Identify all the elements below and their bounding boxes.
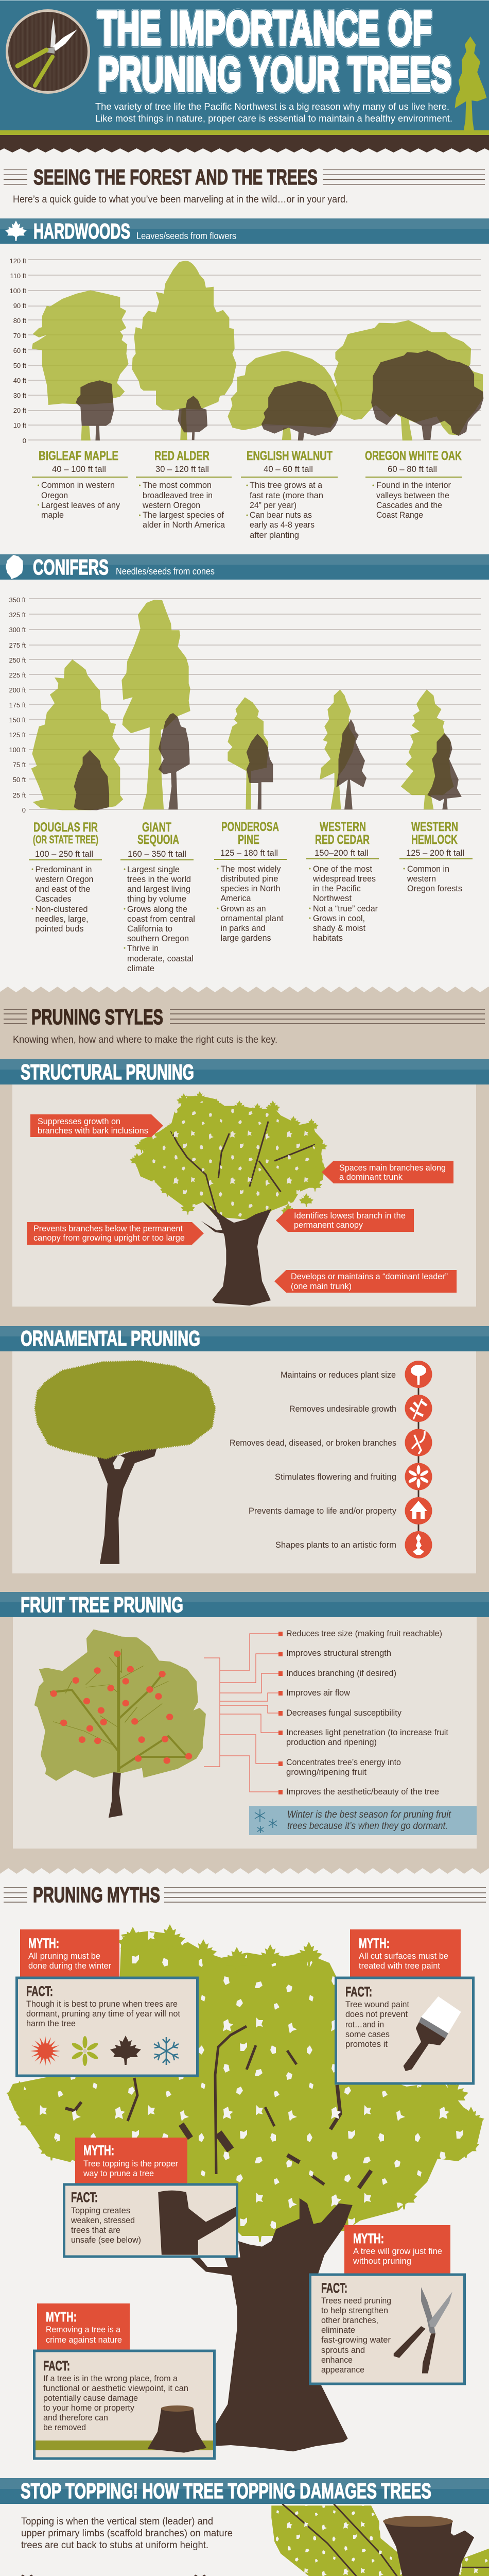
hardwoods height chart xyxy=(9,257,483,445)
tree info: red alder: The most common xyxy=(143,481,212,490)
tree info: giant sequoia: GIANT xyxy=(142,820,171,835)
fact 4: trees need pruning: sprouts and xyxy=(321,2346,365,2355)
tree info: western hemlock: Common in xyxy=(407,865,449,874)
section bar: conifers: Needles/seeds from cones xyxy=(116,566,215,577)
illustration: large tree xyxy=(6,1924,484,2451)
heading: pruning styles xyxy=(4,1005,485,1029)
fact 5: wrong place: potentially cause damage xyxy=(43,2394,138,2403)
fact 5: wrong place: If a tree is in the wrong place, from a xyxy=(43,2374,178,2383)
tree info: bigleaf maple: Common in western xyxy=(41,481,115,490)
tree info: western red cedar: Grows in cool, xyxy=(313,914,365,923)
icon: conifer sprig xyxy=(6,555,23,579)
icon: bare twig xyxy=(412,1431,425,1454)
tree info: bigleaf maple: Oregon xyxy=(41,491,68,500)
callout: spaces main branches: a dominant trunk xyxy=(339,1173,403,1182)
axis labels: 175 ft xyxy=(9,701,26,709)
callout: bark inclusions: branches with bark inclusions xyxy=(38,1126,148,1136)
callout: winter tip: Winter is the best season for pruning fruit xyxy=(287,1809,451,1820)
fact 1: seasons: FACT: xyxy=(26,1984,53,1999)
myth 4: growth without pruning: MYTH: xyxy=(353,2231,384,2246)
tree info: western red cedar: RED CEDAR xyxy=(315,833,370,847)
fact 3: topping creates unsafe trees: Topping creates xyxy=(71,2206,130,2215)
axis labels: 70 ft xyxy=(13,332,26,340)
tree info: english walnut: after planting xyxy=(250,531,299,540)
callout: lowest branch xyxy=(276,1209,414,1232)
myth 4: growth without pruning: without pruning xyxy=(353,2257,411,2266)
tree info: english walnut: ENGLISH WALNUT xyxy=(247,449,333,463)
axis labels: 100 ft xyxy=(9,746,26,754)
myth 1: winter pruning: MYTH: xyxy=(28,1936,59,1951)
tree info: giant sequoia: 160 – 350 ft tall xyxy=(128,850,186,859)
myth 4: growth without pruning: A tree will grow just fine xyxy=(353,2247,442,2256)
myth 4: growth without pruning xyxy=(344,2225,450,2274)
tree info: giant sequoia: California to xyxy=(127,924,172,934)
axis labels xyxy=(9,257,26,445)
panel: structural pruning: STRUCTURAL PRUNING xyxy=(21,1060,194,1084)
tree info: ponderosa pine: distributed pine xyxy=(220,874,278,884)
axis labels: 50 ft xyxy=(13,776,26,784)
tree info: douglas fir: (OR STATE TREE) xyxy=(33,833,98,846)
tree info: giant sequoia: coast from central xyxy=(127,914,195,924)
axis labels xyxy=(9,596,26,814)
heading: pruning myths xyxy=(4,1883,486,1907)
tree info: bigleaf maple: Largest leaves of any xyxy=(41,501,120,510)
myth 1: winter pruning xyxy=(20,1929,119,1977)
tree info: douglas fir: Cascades xyxy=(35,894,71,904)
icon: topped trunk xyxy=(158,2191,236,2255)
tree silhouettes: conifers xyxy=(31,600,462,810)
fact 4: trees need pruning: appearance xyxy=(321,2365,364,2375)
tree info: douglas fir: 100 – 250 ft tall xyxy=(35,850,93,859)
myth 1: winter pruning: done during the winter xyxy=(28,1961,111,1971)
tree info: bigleaf maple xyxy=(32,449,128,520)
tree info: western red cedar: Northwest xyxy=(313,894,352,903)
myth 2: tree paint: All cut surfaces must be xyxy=(359,1952,448,1961)
tree info: western hemlock: HEMLOCK xyxy=(411,833,458,847)
myth 2: tree paint: MYTH: xyxy=(359,1936,390,1951)
tree info: red alder: The largest species of xyxy=(143,511,224,520)
tree info: bigleaf maple: 40 – 100 ft tall xyxy=(52,465,106,474)
tree info: oregon white oak: Found in the interior xyxy=(376,481,451,490)
tree info: english walnut: Can bear nuts as xyxy=(250,511,312,520)
callout: bark inclusions xyxy=(30,1114,163,1137)
benefits list: Induces branching (if desired) xyxy=(286,1669,396,1678)
callout: winter tip xyxy=(249,1806,477,1835)
tree info: english walnut: 24” per year) xyxy=(250,501,296,510)
fact 2: wound paint: promotes it xyxy=(345,2040,388,2049)
tree info: red alder: RED ALDER xyxy=(154,449,209,463)
tree info: ponderosa pine: ornamental plant xyxy=(220,914,284,923)
tree info: douglas fir: and east of the xyxy=(35,885,91,894)
benefits list with icons: Shapes plants to an artistic form xyxy=(275,1540,396,1550)
tree info: giant sequoia: trees in the world xyxy=(127,875,191,884)
illustration: ornamental tree xyxy=(35,1361,215,1564)
fact 4: trees need pruning: eliminate xyxy=(321,2326,355,2335)
benefits list with icons: Prevents damage to life and/or property xyxy=(249,1506,397,1516)
definition text: Topping is when the vertical stem (leader) and xyxy=(21,2516,213,2527)
tree info: western red cedar: habitats xyxy=(313,934,343,943)
tree info: giant sequoia: climate xyxy=(127,964,154,973)
fact 4: trees need pruning: FACT: xyxy=(321,2280,347,2296)
callout: dominant leader: (one main trunk) xyxy=(291,1282,352,1291)
tree info: english walnut: This tree grows at a xyxy=(250,481,323,490)
icon: snowflakes xyxy=(255,1809,277,1833)
callout: spaces main branches: Spaces main branches along xyxy=(339,1163,446,1173)
tree info: ponderosa pine: PONDEROSA xyxy=(221,820,279,834)
icon: tall tree silhouette xyxy=(455,37,486,131)
definition text: trees are cut back to stubs at uniform height. xyxy=(21,2540,208,2551)
tree info: western hemlock: 125 – 200 ft tall xyxy=(406,849,464,858)
illustration: topped tree xyxy=(271,2504,489,2576)
axis labels: 30 ft xyxy=(13,392,26,399)
icon: snowflake xyxy=(154,2037,179,2065)
tree info: douglas fir: needles, large, xyxy=(35,914,89,924)
fact 5: wrong place: FACT: xyxy=(43,2358,70,2374)
fact 4: trees need pruning: Trees need pruning xyxy=(321,2296,391,2306)
fact 2: wound paint: does not prevent xyxy=(345,2010,408,2019)
tree info: western hemlock: Oregon forests xyxy=(407,884,462,893)
tree info: giant sequoia: and largest living xyxy=(127,885,190,894)
conifers height chart xyxy=(9,596,481,814)
fact 2: wound paint xyxy=(336,1978,474,2083)
benefits list: Improves air flow xyxy=(286,1688,350,1698)
benefits list: Improves the aesthetic/beauty of the tree xyxy=(286,1787,439,1797)
tree info: western red cedar: One of the most xyxy=(313,865,372,874)
myth 3: tree topping: way to prune a tree xyxy=(83,2169,154,2178)
tree info: ponderosa pine xyxy=(214,820,287,943)
tree info: giant sequoia: southern Oregon xyxy=(127,934,189,943)
tree info: douglas fir: western Oregon xyxy=(35,875,94,884)
axis labels: 200 ft xyxy=(9,686,26,694)
fact 5: wrong place: be removed xyxy=(43,2423,86,2432)
icon: spring flower xyxy=(71,2036,99,2066)
tree info: western red cedar: 150–200 ft tall xyxy=(315,849,369,858)
panel: fruit tree pruning: FRUIT TREE PRUNING xyxy=(21,1592,183,1617)
tree info: english walnut xyxy=(241,449,338,540)
myth 1: winter pruning: All pruning must be xyxy=(28,1952,100,1961)
tree info: western hemlock: WESTERN xyxy=(411,820,458,834)
benefits list: Improves structural strength xyxy=(286,1649,391,1658)
tree info: english walnut: fast rate (more than xyxy=(250,491,323,500)
myth 5: removing a tree: MYTH: xyxy=(46,2309,77,2325)
axis labels: 150 ft xyxy=(9,716,26,724)
icon: paint brush xyxy=(404,1996,461,2071)
fact 3: topping creates unsafe trees xyxy=(64,2184,237,2257)
icon: leafy twig xyxy=(410,1399,427,1419)
icon: pruning shears in wooden circle xyxy=(6,9,90,94)
axis labels: 10 ft xyxy=(13,421,26,429)
fact 3: topping creates unsafe trees: trees that are xyxy=(71,2226,120,2235)
benefits list: growing/ripening fruit xyxy=(286,1768,366,1777)
tree info: english walnut: early as 4-8 years xyxy=(250,520,315,530)
heading: pruning myths: PRUNING MYTHS xyxy=(33,1883,160,1907)
axis labels: 40 ft xyxy=(13,377,26,384)
fact 3: topping creates unsafe trees: FACT: xyxy=(71,2190,98,2205)
tree info: western red cedar: in the Pacific xyxy=(313,884,361,893)
fact 1: seasons: harm the tree xyxy=(26,2019,76,2028)
axis labels: 350 ft xyxy=(9,596,26,604)
tree info: giant sequoia: Largest single xyxy=(127,865,180,874)
fact 1: seasons: dormant, pruning any time of year will not xyxy=(26,2009,180,2019)
callout: spaces main branches xyxy=(322,1161,453,1183)
myth 3: tree topping: Tree topping is the proper xyxy=(83,2159,178,2168)
axis labels: 125 ft xyxy=(9,731,26,739)
tree info: ponderosa pine: The most widely xyxy=(220,865,281,874)
axis labels: 60 ft xyxy=(13,347,26,354)
section bar: conifers: CONIFERS xyxy=(33,555,109,579)
callout: winter tip: trees because it’s when they go dormant. xyxy=(287,1821,448,1832)
benefits list with icons: Removes undesirable growth xyxy=(289,1404,396,1414)
callout: bark inclusions: Suppresses growth on xyxy=(38,1117,120,1126)
benefits list xyxy=(278,1629,448,1797)
callout: prevents branches: Prevents branches below the permanent xyxy=(33,1224,183,1233)
tree info: red alder: broadleaved tree in xyxy=(143,491,213,500)
heading: pruning styles: PRUNING STYLES xyxy=(31,1005,163,1029)
benefits list with icons: Stimulates flowering and fruiting xyxy=(275,1472,396,1482)
axis labels: 110 ft xyxy=(10,272,26,280)
callout: dominant leader: Develops or maintains a “dominant leader” xyxy=(291,1272,448,1281)
myth 5: removing a tree xyxy=(37,2303,130,2350)
callout: lowest branch: permanent canopy xyxy=(294,1221,363,1230)
tree info: oregon white oak: Cascades and the xyxy=(376,501,442,510)
icon: topiary xyxy=(413,1534,424,1555)
illustration: structural tree xyxy=(130,1091,327,1306)
axis labels: 50 ft xyxy=(13,362,26,369)
axis labels: 0 xyxy=(23,437,26,445)
fact 4: trees need pruning: enhance xyxy=(321,2355,353,2365)
connector lines xyxy=(204,1634,278,1792)
icon: damaged house xyxy=(410,1501,427,1519)
icon: flower xyxy=(408,1465,429,1488)
tree info: oregon white oak xyxy=(365,449,462,520)
fact 2: wound paint: Tree wound paint xyxy=(345,2000,409,2009)
fact 1: seasons: Though it is best to prune when trees are xyxy=(26,1999,178,2009)
axis labels: 90 ft xyxy=(13,302,26,310)
tree info: ponderosa pine: PINE xyxy=(238,833,259,847)
section bar: conifers xyxy=(0,554,489,580)
section bar: hardwoods: HARDWOODS xyxy=(33,219,130,243)
fact 4: trees need pruning xyxy=(310,2275,464,2384)
callout: lowest branch: Identifies lowest branch in the xyxy=(294,1211,406,1221)
axis labels: 225 ft xyxy=(9,671,26,679)
tree info: ponderosa pine: America xyxy=(220,894,251,903)
myth 5: removing a tree: Removing a tree is a xyxy=(46,2325,121,2334)
tree info: giant sequoia xyxy=(120,820,195,973)
tree info: red alder: alder in North America xyxy=(143,520,225,530)
axis labels: 20 ft xyxy=(13,406,26,414)
icon: tree stump xyxy=(148,2405,206,2453)
fact 3: topping creates unsafe trees: unsafe (see below) xyxy=(71,2235,141,2245)
fact 3: topping creates unsafe trees: weaken, stressed xyxy=(71,2216,135,2225)
icon: small tree xyxy=(411,1365,426,1385)
tree info: oregon white oak: valleys between the xyxy=(376,491,449,500)
illustration: fruit tree xyxy=(34,1630,206,1818)
title xyxy=(98,2,451,101)
fact 2: wound paint: some cases xyxy=(345,2030,390,2039)
axis labels: 120 ft xyxy=(9,257,26,265)
fact 5: wrong place: and therefore can xyxy=(43,2413,108,2422)
tree info: giant sequoia: Thrive in xyxy=(127,944,159,953)
axis labels: 25 ft xyxy=(13,791,26,799)
heading: seeing the forest and the trees: SEEING THE FOREST AND THE TREES xyxy=(33,165,318,189)
benefits list: Reduces tree size (making fruit reachable) xyxy=(286,1629,442,1638)
fact 1: seasons xyxy=(16,1978,198,2076)
fact 5: wrong place: to your home or property xyxy=(43,2403,135,2413)
intro text: The variety of tree life the Pacific Northwest is a big reason why many of us live here. xyxy=(95,101,449,112)
tree info: western red cedar xyxy=(306,820,379,943)
tree info: red alder: western Oregon xyxy=(142,501,200,510)
tree info: oregon white oak: Coast Range xyxy=(376,511,423,520)
definition text: upper primary limbs (scaffold branches) on mature xyxy=(21,2528,233,2539)
intro text: Like most things in nature, proper care is essential to maintain a healthy environment. xyxy=(95,113,452,124)
intro text: pruning styles: Knowing when, how and where to make the right cuts is the key. xyxy=(13,1035,277,1045)
tree info: english walnut: 40 – 60 ft tall xyxy=(264,465,313,474)
callout: prevents branches xyxy=(27,1222,204,1245)
benefits list with icons: Removes dead, diseased, or broken branches xyxy=(230,1438,396,1448)
tree silhouettes: hardwoods xyxy=(32,261,483,440)
section bar: hardwoods xyxy=(0,218,489,244)
panel: fruit tree pruning xyxy=(0,1592,489,1849)
tree info: giant sequoia: SEQUOIA xyxy=(137,833,179,847)
myth 2: tree paint xyxy=(350,1929,461,1977)
section: stop topping xyxy=(0,2478,489,2576)
benefits list with icons: Maintains or reduces plant size xyxy=(281,1370,396,1380)
callout: prevents branches: canopy from growing upright or too large xyxy=(33,1233,185,1243)
icon: maple leaf xyxy=(5,221,27,241)
intro text xyxy=(95,101,452,124)
myth 5: removing a tree: crime against nature xyxy=(46,2335,122,2345)
panel: structural pruning xyxy=(0,1059,489,1307)
benefits list with icons xyxy=(230,1361,432,1558)
axis labels: 275 ft xyxy=(9,641,26,649)
axis labels: 0 xyxy=(22,806,26,814)
fact 2: wound paint: FACT: xyxy=(345,1984,372,1999)
tree info: ponderosa pine: in parks and xyxy=(220,924,266,933)
tree info: western hemlock: western xyxy=(407,874,436,884)
fact 4: trees need pruning: fast-growing water xyxy=(321,2335,391,2345)
axis labels: 80 ft xyxy=(13,317,26,325)
axis labels: 325 ft xyxy=(9,611,26,619)
tree info: douglas fir: DOUGLAS FIR xyxy=(33,820,98,835)
intro text: quick guide: Here’s a quick guide to what you’ve been marveling at in the wild…or in your yard. xyxy=(13,194,348,205)
icon: hedge shears xyxy=(394,2287,452,2374)
icon: sunburst xyxy=(30,2036,60,2066)
tree info: western red cedar: Not a “true” cedar xyxy=(313,904,378,913)
fact 5: wrong place xyxy=(34,2351,214,2459)
tree info: western red cedar: shady & moist xyxy=(313,924,365,933)
tree info: oregon white oak: 60 – 80 ft tall xyxy=(388,465,437,474)
header panel xyxy=(0,0,489,152)
tree info: ponderosa pine: species in North xyxy=(220,884,280,893)
axis labels: 250 ft xyxy=(9,656,26,664)
tree info: western red cedar: WESTERN xyxy=(320,820,366,834)
tree info: red alder: 30 – 120 ft tall xyxy=(155,465,209,474)
fact 5: wrong place: functional or aesthetic viewpoint, it can xyxy=(43,2384,188,2393)
tree info: douglas fir xyxy=(29,820,102,934)
tree info: red alder xyxy=(136,449,232,530)
section bar: hardwoods: Leaves/seeds from flowers xyxy=(136,231,236,241)
axis labels: 300 ft xyxy=(9,626,26,634)
fact 4: trees need pruning: other branches, xyxy=(321,2316,378,2325)
tree info: ponderosa pine: large gardens xyxy=(220,934,271,943)
tree info: giant sequoia: moderate, coastal xyxy=(127,954,194,963)
tree info: giant sequoia: thing by volume xyxy=(127,894,186,904)
tree info: douglas fir: pointed buds xyxy=(35,924,83,934)
tree info: ponderosa pine: 125 – 180 ft tall xyxy=(220,849,278,858)
panel: ornamental pruning xyxy=(0,1326,489,1573)
tree info: douglas fir: Predominant in xyxy=(35,865,92,874)
tree info: western hemlock xyxy=(399,820,473,893)
tree info: ponderosa pine: Grown as an xyxy=(220,904,266,913)
fact 4: trees need pruning: to help strengthen xyxy=(321,2306,388,2315)
fact 2: wound paint: rot…and in xyxy=(345,2020,384,2029)
tree info: bigleaf maple: BIGLEAF MAPLE xyxy=(39,449,118,463)
benefits list: Increases light penetration (to increase fruit xyxy=(286,1728,448,1737)
tree info: douglas fir: Non-clustered xyxy=(35,905,88,914)
tree info: bigleaf maple: maple xyxy=(41,511,64,520)
benefits list: production and ripening) xyxy=(286,1738,377,1747)
tree info: western red cedar: widespread trees xyxy=(312,874,376,884)
definition text xyxy=(21,2516,233,2551)
benefits list: Concentrates tree’s energy into xyxy=(286,1758,401,1767)
myth 2: tree paint: treated with tree paint xyxy=(359,1961,440,1971)
axis labels: 100 ft xyxy=(9,287,26,295)
myth 3: tree topping: MYTH: xyxy=(83,2143,114,2158)
callout: dominant leader xyxy=(274,1270,457,1293)
benefits list: Decreases fungal susceptibility xyxy=(286,1708,402,1718)
panel: ornamental pruning: ORNAMENTAL PRUNING xyxy=(21,1326,200,1350)
myth 3: tree topping xyxy=(75,2138,187,2183)
icon: autumn leaf xyxy=(110,2036,141,2065)
tree info: giant sequoia: Grows along the xyxy=(127,905,187,914)
axis labels: 75 ft xyxy=(13,761,26,769)
